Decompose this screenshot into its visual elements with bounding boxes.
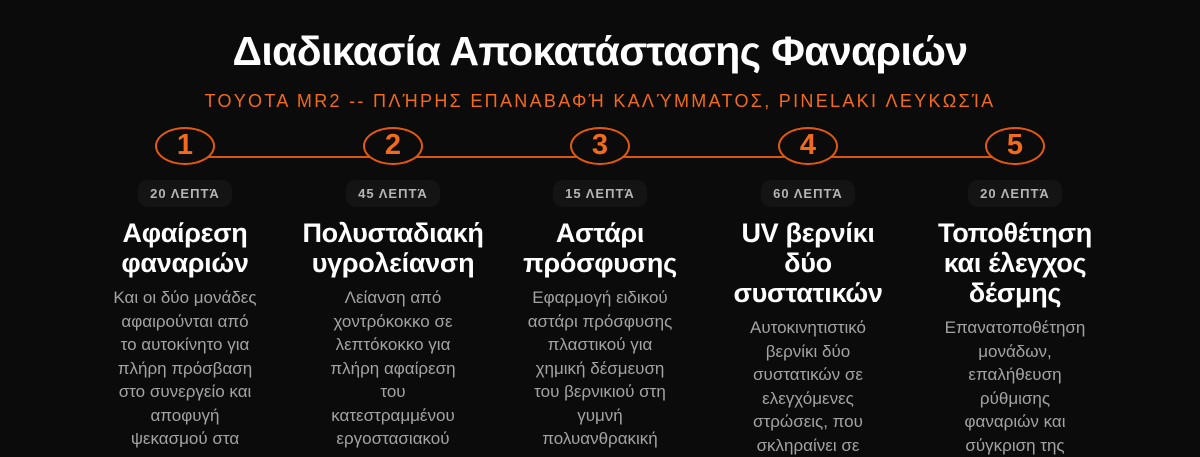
step 2: εργοστασιακού	[336, 429, 450, 448]
step 5: Επανατοποθέτηση	[945, 318, 1085, 337]
step 5: φαναριών και	[964, 412, 1066, 431]
step 4: Αυτοκινητιστικό	[750, 318, 866, 337]
step 3: Αστάρι	[556, 218, 644, 248]
step 3	[523, 127, 677, 448]
step 3: 3	[592, 129, 608, 161]
step 4: UV βερνίκι	[741, 218, 875, 248]
step 3: αστάρι πρόσφυσης	[528, 312, 672, 330]
step 2: 2	[385, 129, 401, 161]
step 5: δέσμης	[969, 278, 1061, 308]
step 1: αποφυγή	[150, 406, 220, 424]
step 3: χημική δέσμευση	[536, 358, 664, 378]
step 1: ψεκασμού στα	[131, 429, 239, 448]
step 3: πολυανθρακική	[542, 429, 658, 448]
step 2: Λείανση από	[345, 288, 441, 307]
step 1: φαναριών	[121, 248, 249, 278]
step 3: πλαστικού για	[548, 335, 652, 354]
step 5: 20 ΛΕΠΤΆ	[980, 186, 1050, 201]
step 5: ρύθμισης	[980, 388, 1050, 408]
step 2: υγρολείανση	[312, 248, 474, 278]
step 3: πρόσφυσης	[523, 248, 677, 278]
step 4: συστατικών	[733, 278, 883, 308]
step 5	[938, 127, 1092, 454]
step 2: πλήρη αφαίρεση	[330, 358, 456, 378]
step 4: 60 ΛΕΠΤΆ	[773, 186, 843, 201]
step 2: του	[380, 382, 406, 401]
title: Διαδικασία Αποκατάστασης Φαναριών	[232, 28, 967, 74]
step 2	[302, 127, 484, 448]
step 4: 4	[800, 129, 816, 161]
step 4: δύο	[784, 248, 832, 278]
step 1: πλήρη πρόσβαση	[118, 358, 252, 378]
step 5: μονάδων,	[978, 342, 1052, 360]
step 5: επαλήθευση	[968, 365, 1062, 384]
step 1: στο συνεργείο και	[119, 382, 251, 401]
step 5: 5	[1007, 129, 1023, 161]
step 4: συστατικών σε	[753, 365, 863, 384]
step 5: και έλεγχος	[944, 248, 1086, 278]
step 4: σκληραίνει σε	[757, 436, 859, 454]
step 5: Τοποθέτηση	[938, 218, 1092, 248]
step 2: χοντρόκοκκο σε	[333, 312, 453, 330]
step 2: 45 ΛΕΠΤΆ	[358, 186, 428, 201]
step 1: 20 ΛΕΠΤΆ	[150, 186, 220, 201]
step 5: σύγκριση της	[965, 436, 1065, 454]
step 1: αφαιρούνται από	[121, 312, 249, 330]
step 2: λεπτόκοκκο για	[336, 335, 450, 354]
step 1: Και οι δύο μονάδες	[113, 288, 257, 307]
step 4: βερνίκι δύο	[766, 342, 850, 360]
step 4: στρώσεις, που	[753, 412, 863, 431]
step 1: Αφαίρεση	[122, 218, 248, 248]
step 3: του βερνικιού στη	[534, 382, 666, 401]
step 3: γυμνή	[577, 406, 623, 424]
step 3: Εφαρμογή ειδικού	[532, 288, 668, 307]
step 1: το αυτοκίνητο για	[121, 335, 249, 354]
step 1: 1	[177, 129, 193, 161]
step 1	[113, 127, 257, 448]
subtitle: TOYOTA MR2 -- ΠΛΉΡΗΣ ΕΠΑΝΑΒΑΦΉ ΚΑΛΎΜΜΑΤΟΣ, PINELAKI ΛΕΥΚΩΣΊΑ	[204, 91, 996, 111]
step 4: ελεγχόμενες	[762, 388, 854, 408]
step 2: Πολυσταδιακή	[302, 218, 484, 248]
step 3: 15 ΛΕΠΤΆ	[565, 186, 635, 201]
timeline connector line	[185, 156, 1015, 158]
step 4	[733, 127, 883, 454]
step 2: κατεστραμμένου	[331, 406, 455, 424]
